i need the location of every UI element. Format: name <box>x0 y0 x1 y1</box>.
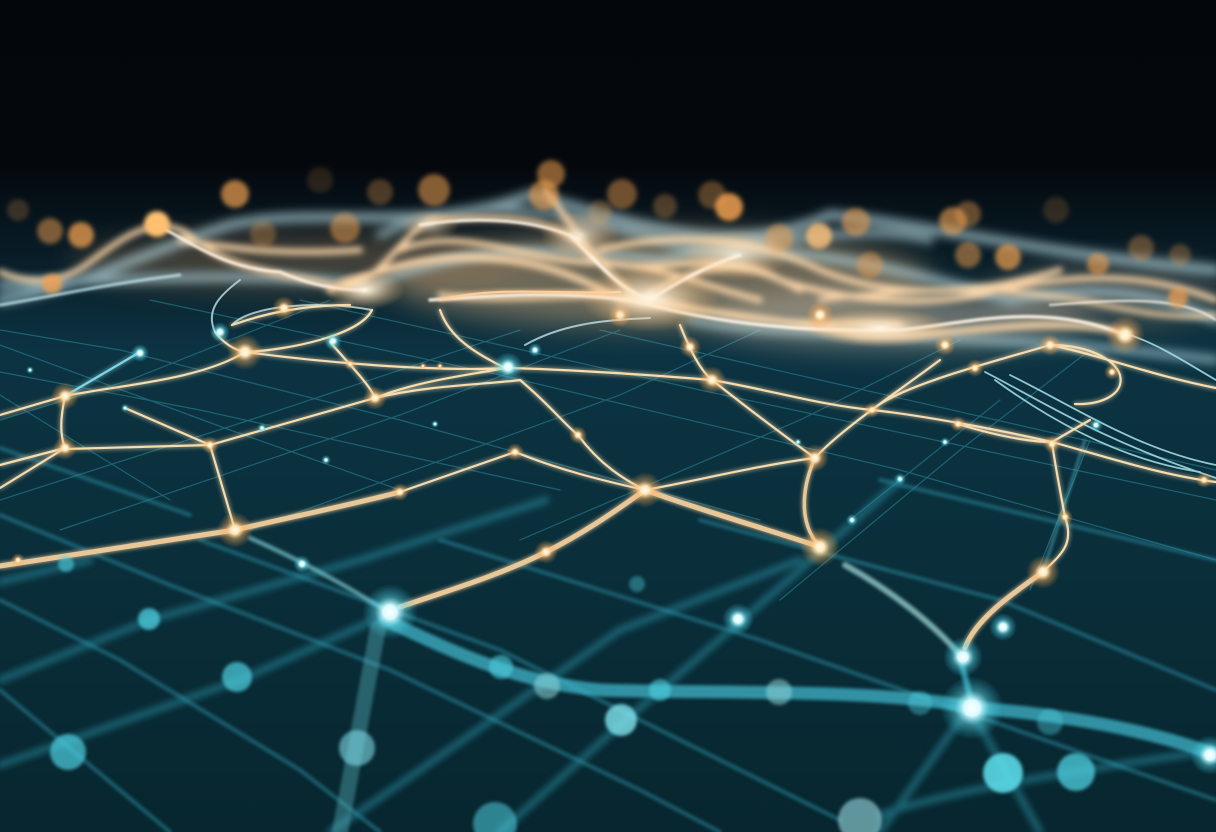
warm light paths <box>0 291 1216 648</box>
bokeh light dots <box>7 160 1191 308</box>
blurred flowing waves <box>0 190 1216 360</box>
soft cool ribbons <box>0 195 1216 360</box>
cool fibres on the right <box>985 335 1216 478</box>
warm ribbons <box>0 190 1216 336</box>
bright haze core <box>580 264 720 332</box>
translucent teal discs <box>50 556 1095 832</box>
teal ribbons in the foreground <box>0 275 1216 832</box>
warm nodes <box>11 209 1212 589</box>
bright ribbons <box>150 220 1216 335</box>
perspective grid <box>0 300 1216 832</box>
haze behind the waves <box>70 232 1216 348</box>
cool nodes <box>26 322 1216 832</box>
